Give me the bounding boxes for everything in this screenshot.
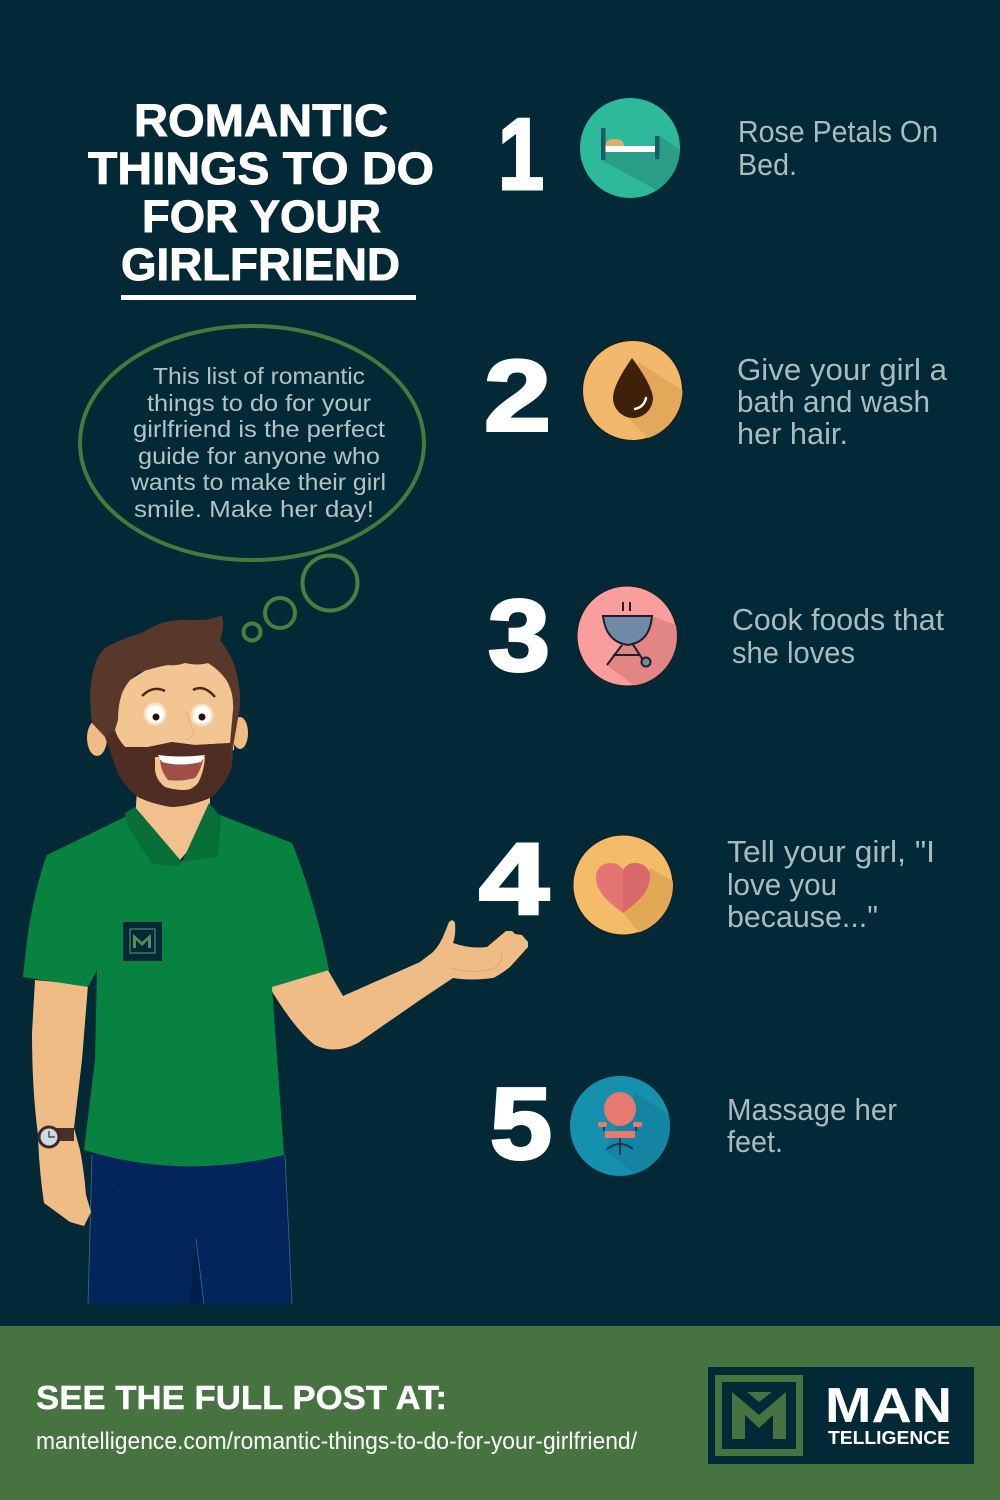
title: THINGS TO DO xyxy=(88,143,434,194)
text 3: Cook foods that xyxy=(732,602,944,637)
text 2: Give your girl a xyxy=(737,352,948,387)
icon: grill xyxy=(576,586,678,686)
title: GIRLFRIEND xyxy=(121,239,400,290)
icon: heart xyxy=(573,835,680,940)
text 5: feet. xyxy=(727,1124,783,1159)
text 2 xyxy=(737,352,948,451)
shirt xyxy=(23,803,329,1166)
mouth xyxy=(155,755,205,790)
icon: chair xyxy=(570,1076,670,1176)
item 4 xyxy=(479,834,932,936)
text 1: Rose Petals On xyxy=(738,114,938,149)
text 3 xyxy=(732,602,944,670)
bubble text: wants to make their girl xyxy=(130,469,386,495)
bubble text: things to do for your xyxy=(147,390,371,416)
text 4: Tell your girl, "I xyxy=(727,834,935,869)
wristwatch xyxy=(38,1126,74,1148)
item 3 xyxy=(488,586,944,686)
text 1 xyxy=(738,114,938,182)
title xyxy=(88,95,434,300)
character illustration xyxy=(23,615,528,1304)
icon: water drop xyxy=(582,340,690,445)
text 2: her hair. xyxy=(737,416,848,451)
footer panel xyxy=(0,1326,1000,1500)
text 5: Massage her xyxy=(727,1092,897,1127)
title: ROMANTIC xyxy=(134,95,388,146)
text 4 xyxy=(727,834,935,934)
logo xyxy=(708,1367,974,1464)
bubble text: guide for anyone who xyxy=(138,443,380,469)
footer heading: SEE THE FULL POST AT: xyxy=(36,1379,447,1416)
neck xyxy=(135,790,210,860)
item 5 xyxy=(492,1076,897,1176)
number 5: 5 xyxy=(490,1068,552,1180)
pants xyxy=(88,1150,292,1304)
ears xyxy=(87,717,248,756)
title: FOR YOUR xyxy=(142,191,381,242)
text 5 xyxy=(727,1092,897,1159)
text 2: bath and wash xyxy=(737,384,930,419)
number 2: 2 xyxy=(484,340,551,452)
text 4: because..." xyxy=(727,899,878,934)
footer url: mantelligence.com/romantic-things-to-do-for-your-girlfriend/ xyxy=(36,1428,637,1455)
bubble text: This list of romantic xyxy=(153,363,365,389)
right arm and hand xyxy=(268,920,528,1050)
hair and beard xyxy=(90,615,240,807)
item 1 xyxy=(502,98,936,198)
face xyxy=(112,658,236,765)
eyes and brows xyxy=(142,688,215,740)
number 1: 1 xyxy=(498,99,544,211)
logo: MAN xyxy=(825,1379,952,1433)
shirt logo patch xyxy=(123,922,162,961)
text 1: Bed. xyxy=(738,147,797,182)
number 3: 3 xyxy=(488,580,550,692)
text 4: love you xyxy=(727,867,837,902)
logo: TELLIGENCE xyxy=(828,1428,950,1448)
bubble text: smile. Make her day! xyxy=(134,496,374,522)
bubble text xyxy=(130,363,386,522)
left arm and hand xyxy=(32,980,91,1226)
number 4: 4 xyxy=(479,824,549,936)
text 3: she loves xyxy=(732,635,855,670)
bubble text: girlfriend is the perfect xyxy=(133,416,385,442)
item 2 xyxy=(484,340,948,452)
thought bubble xyxy=(80,326,424,640)
icon: bed xyxy=(580,98,680,198)
